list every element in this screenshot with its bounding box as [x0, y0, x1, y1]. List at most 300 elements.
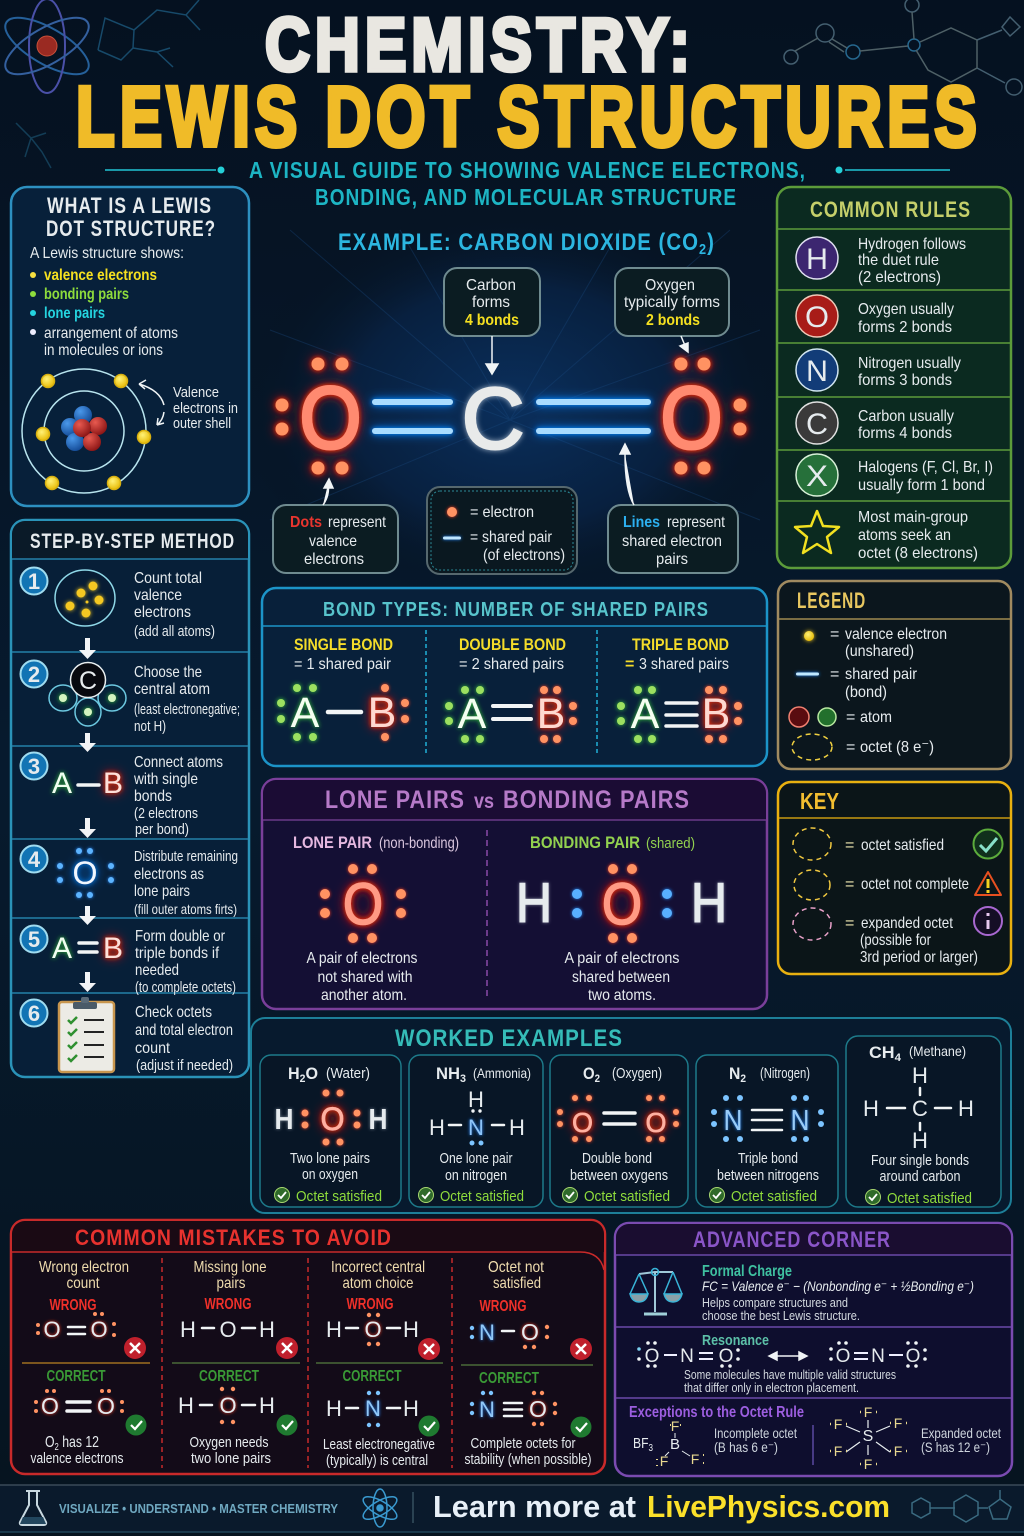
callout: oxygen forms 2 bonds — [615, 268, 729, 336]
subtitle — [105, 157, 950, 210]
example card: water: O — [305, 1064, 318, 1083]
rule: nitrogen — [796, 349, 961, 391]
mistake: incorrect central atom — [316, 1259, 443, 1469]
icon: step 5 double bond: A — [52, 932, 72, 965]
mistake: missing lone pairs: CORRECT — [199, 1368, 259, 1385]
text block: formal charge: Helps compare structures and — [702, 1296, 848, 1310]
example card: ammonia: Octet satisfied — [440, 1188, 524, 1205]
legend item: shared pair: = — [830, 666, 839, 683]
heading: example carbon dioxide: 2 — [699, 241, 707, 258]
diagram: BF3: F — [671, 1418, 679, 1434]
diagram: BF3: F — [660, 1453, 668, 1469]
arrow: lines callout — [620, 444, 634, 505]
example card: ammonia — [409, 1055, 543, 1207]
title: CHEMISTRY: — [265, 2, 695, 86]
title — [76, 2, 982, 164]
example card: oxygen: between oxygens — [570, 1167, 668, 1184]
mistake: missing lone pairs: H — [259, 1317, 275, 1342]
example card: nitrogen: N — [790, 1105, 810, 1137]
diagram: resonance structures: N — [871, 1346, 885, 1367]
text block: step 1 — [134, 570, 215, 640]
mistake: octet not satisfied: N — [479, 1320, 495, 1345]
example card: oxygen: O — [583, 1064, 596, 1083]
diagram: resonance structures: O — [836, 1346, 850, 1367]
callout: lines represent: shared electron — [622, 533, 722, 550]
mistake: octet not satisfied: stability (when possible) — [464, 1451, 592, 1468]
arrow: carbon callout — [486, 336, 498, 374]
bond type: triple: = — [625, 656, 634, 673]
example card: water: on oxygen — [302, 1166, 358, 1183]
bond type: double: A — [458, 690, 487, 738]
mistake: wrong electron count — [22, 1259, 150, 1467]
call to action — [433, 1489, 890, 1524]
mistake: missing lone pairs: O — [219, 1317, 237, 1342]
rule: hydrogen: Hydrogen follows — [858, 236, 966, 253]
example card: water: O — [320, 1101, 344, 1137]
mistake: missing lone pairs: two lone pairs — [191, 1450, 271, 1467]
text block: step 1: (add all atoms) — [134, 623, 215, 640]
diagram: SF6: F — [864, 1456, 872, 1472]
mistake: wrong electron count: has 12 — [59, 1434, 99, 1451]
rule: hydrogen — [796, 236, 966, 286]
legend item: shared pair — [796, 666, 918, 701]
bond type: triple: B — [702, 690, 730, 738]
rule: hydrogen: H — [806, 243, 828, 276]
icon: atom footer — [360, 1489, 400, 1527]
callout: lines represent — [608, 505, 738, 573]
callout: oxygen forms 2 bonds: typically forms — [624, 294, 720, 311]
bonding pair column: H — [516, 871, 552, 934]
text block: expanded octet: (S has 12 e⁻) — [921, 1439, 990, 1455]
heading: lone vs bonding: BONDING PAIRS — [503, 786, 690, 814]
mistake: wrong electron count: count — [66, 1275, 100, 1292]
rule: halogens: Halogens (F, Cl, Br, I) — [858, 459, 993, 476]
mistake: missing lone pairs: H — [178, 1393, 194, 1418]
atom: right oxygen — [660, 358, 746, 474]
panel: advanced corner — [615, 1223, 1012, 1476]
heading: resonance: Resonance — [702, 1332, 769, 1349]
heading: lone vs bonding: LONE PAIRS — [325, 786, 465, 814]
legend item: valence electron: (unshared) — [845, 643, 914, 660]
mistake: wrong electron count: O — [43, 1317, 61, 1342]
rule: halogens — [796, 454, 993, 496]
rule: carbon: forms 4 bonds — [858, 425, 952, 442]
heading: common rules: COMMON RULES — [810, 197, 971, 222]
panel: key — [778, 782, 1011, 974]
mistake: octet not satisfied: O — [521, 1319, 539, 1345]
mistake: incorrect central atom: CORRECT — [342, 1368, 402, 1385]
panel: common rules — [777, 187, 1011, 568]
bond type: triple: TRIPLE BOND — [632, 635, 729, 654]
text block: lewis structure list: arrangement of atoms — [44, 325, 178, 342]
rule: nitrogen: Nitrogen usually — [858, 355, 961, 372]
icon: step 1 electrons — [55, 570, 115, 626]
mistake: missing lone pairs: pairs — [216, 1275, 246, 1292]
legend item: shared pair: (bond) — [845, 684, 887, 701]
example card: methane: 4 — [895, 1052, 902, 1064]
mistake: wrong electron count: WRONG — [50, 1297, 96, 1314]
legend item: atom: = — [846, 709, 855, 726]
text block: incomplete octet: Incomplete octet — [714, 1425, 797, 1441]
diagram: SF6: F — [834, 1416, 842, 1432]
rule: halogens: usually form 1 bond — [858, 477, 985, 494]
example card: water: 2 — [300, 1073, 305, 1085]
example card: water: (Water) — [326, 1065, 370, 1082]
heading: bond types: BOND TYPES: NUMBER OF SHARED PAIRS — [323, 599, 709, 621]
example card: oxygen: O — [572, 1107, 593, 1138]
example card: methane: around carbon — [880, 1168, 960, 1185]
text block: step 4: lone pairs — [134, 883, 190, 900]
bond type: single: = 1 shared pair — [294, 656, 392, 673]
bonding pair column: shared between — [572, 969, 670, 986]
mistake: missing lone pairs: WRONG — [204, 1296, 252, 1313]
text block: expanded octet — [921, 1425, 1001, 1455]
text block: lewis structure list: A Lewis structure shows: — [30, 245, 184, 262]
example card: methane: C — [912, 1096, 928, 1121]
example card: methane: H — [912, 1128, 928, 1153]
example card: water: H — [368, 1104, 388, 1136]
text block: lewis structure list: bonding pairs — [44, 286, 129, 303]
heading: lone vs bonding — [325, 786, 690, 814]
heading: step-by-step: STEP-BY-STEP METHOD — [30, 530, 235, 553]
atom: left oxygen: O — [300, 368, 362, 467]
bond type: single — [277, 635, 409, 741]
decorative molecule top right — [784, 0, 1022, 95]
rule: carbon: Carbon usually — [858, 408, 954, 425]
callout: dots represent — [273, 505, 398, 573]
panel: common mistakes — [11, 1220, 605, 1474]
bond type: single: A — [291, 689, 320, 737]
mistake: incorrect central atom: H — [403, 1396, 419, 1421]
heading: what is: DOT STRUCTURE? — [46, 216, 216, 241]
icon: step 5 double bond — [52, 932, 123, 965]
mistake: missing lone pairs: H — [180, 1317, 196, 1342]
mistake: incorrect central atom: H — [326, 1396, 342, 1421]
bond type: triple: 3 shared pairs — [639, 656, 729, 673]
legend item: octet: octet (8 e⁻) — [860, 739, 934, 756]
bonding pair column: BONDING PAIR — [530, 833, 640, 852]
mistake: wrong electron count: 2 — [55, 1442, 59, 1453]
example card: methane: CH — [869, 1043, 894, 1062]
lone pair column: another atom. — [321, 987, 407, 1004]
callout: center legend: (of electrons) — [483, 547, 565, 564]
text block: step 3: with single — [133, 771, 198, 788]
mistake: missing lone pairs — [172, 1259, 300, 1467]
callout: center legend — [427, 487, 577, 574]
heading: advanced corner: ADVANCED CORNER — [693, 1227, 891, 1252]
panel: step-by-step method — [11, 520, 249, 1077]
step arrows — [79, 638, 96, 992]
key item: octet satisfied: octet satisfied — [861, 837, 944, 854]
bonding pair column: O — [602, 872, 642, 937]
text block: step 6: Check octets — [135, 1004, 212, 1021]
mistake: incorrect central atom: WRONG — [346, 1296, 394, 1313]
text block: step 2: (least electronegative; — [134, 701, 240, 718]
atom: carbon: C — [462, 371, 524, 467]
heading: common mistakes: COMMON MISTAKES TO AVOID — [75, 1225, 392, 1250]
heading: example carbon dioxide: ) — [707, 229, 715, 256]
rule: carbon: C — [806, 408, 828, 441]
callout: center legend: = electron — [470, 504, 534, 521]
example card: nitrogen: (Nitrogen) — [760, 1065, 810, 1082]
rule: oxygen — [796, 295, 954, 337]
text block: valence electrons note — [173, 384, 238, 432]
arrow: resonance — [769, 1352, 807, 1360]
icon: balance scale — [630, 1268, 682, 1314]
example card: ammonia: NH — [436, 1064, 461, 1083]
callout: dots represent: electrons — [304, 551, 364, 568]
step numbers: 1 — [28, 569, 40, 594]
bond type: double — [445, 635, 577, 743]
bond type: single: SINGLE BOND — [294, 635, 393, 654]
call to action: LivePhysics.com — [647, 1489, 890, 1524]
icon: flask — [20, 1491, 46, 1525]
text block: incomplete octet: (B has 6 e⁻) — [714, 1439, 778, 1455]
text block: step 2: central atom — [134, 681, 210, 698]
text block: valence electrons note: outer shell — [173, 415, 231, 432]
example card: oxygen: Octet satisfied — [584, 1188, 670, 1205]
text block: step 1: valence — [134, 587, 182, 604]
example card: nitrogen: N — [729, 1064, 741, 1083]
mistake: wrong electron count: CORRECT — [46, 1368, 106, 1385]
bond type: double: B — [537, 690, 565, 738]
icon: step 2 central atom: C — [79, 667, 97, 695]
bonds: left double bond — [372, 399, 453, 434]
example card: ammonia: (Ammonia) — [473, 1065, 531, 1081]
callout: carbon forms 4 bonds — [444, 268, 540, 336]
text block: lewis structure list: lone pairs — [44, 305, 105, 322]
text block: resonance description: Some molecules have multiple valid structures — [684, 1368, 896, 1382]
example card: methane: H — [912, 1063, 928, 1088]
panel: worked examples — [251, 1018, 1011, 1213]
example card: nitrogen: 2 — [740, 1073, 746, 1085]
text block: formal charge: choose the best Lewis structure. — [702, 1309, 860, 1323]
mistake: wrong electron count: valence electrons — [30, 1450, 124, 1467]
text block: valence electrons note: Valence — [173, 384, 219, 401]
mistake: wrong electron count: O — [97, 1393, 115, 1419]
mistake: missing lone pairs: Oxygen needs — [190, 1434, 268, 1451]
callout: oxygen forms 2 bonds: 2 bonds — [646, 312, 700, 329]
text block: formal charge — [702, 1263, 974, 1323]
example card: methane: Octet satisfied — [887, 1190, 972, 1207]
callout: oxygen forms 2 bonds: Oxygen — [645, 277, 695, 294]
panel: bond types — [262, 588, 767, 766]
example card: ammonia: on nitrogen — [445, 1167, 507, 1184]
key item: octet not complete — [794, 870, 1001, 900]
step numbers: 2 — [28, 662, 40, 687]
text block: step 2: not H) — [134, 718, 166, 735]
example card: methane: Four single bonds — [871, 1152, 969, 1169]
bonding pair column: two atoms. — [588, 987, 656, 1004]
example card: ammonia: H — [429, 1115, 445, 1140]
callout: carbon forms 4 bonds: forms — [472, 294, 510, 311]
subtitle: BONDING, AND MOLECULAR STRUCTURE — [315, 184, 737, 210]
rule: octet star: Most main-group — [858, 509, 968, 526]
example card: nitrogen: Octet satisfied — [731, 1188, 817, 1205]
rule: octet star: octet (8 electrons) — [858, 545, 978, 562]
icon: step 5 double bond: B — [103, 932, 123, 965]
step numbers: 5 — [28, 927, 40, 952]
diagram: BF3: BF — [633, 1435, 652, 1452]
callout: carbon forms 4 bonds: Carbon — [466, 277, 516, 294]
example card: methane: H — [958, 1096, 974, 1121]
mistake: incorrect central atom: N — [365, 1396, 381, 1421]
text block: step 4: electrons as — [134, 866, 204, 883]
rule: hydrogen: the duet rule — [858, 252, 939, 269]
rule: nitrogen: forms 3 bonds — [858, 372, 952, 389]
example card: nitrogen: between nitrogens — [717, 1167, 819, 1184]
diagram: resonance structures: O — [719, 1346, 733, 1367]
diagram: BF3: F — [691, 1451, 699, 1467]
arrow: valence curve — [139, 380, 164, 425]
mistake: wrong electron count: Wrong electron — [39, 1259, 129, 1276]
example card: ammonia: H — [509, 1115, 525, 1140]
example card: oxygen — [550, 1055, 688, 1207]
footer bar — [0, 1485, 1024, 1532]
legend item: valence electron: valence electron — [845, 626, 947, 643]
step numbers: 6 — [28, 1001, 40, 1026]
text block: step 6: (adjust if needed) — [136, 1057, 233, 1074]
heading: lone vs bonding: vs — [474, 790, 494, 813]
mistake: missing lone pairs: Missing lone — [194, 1259, 267, 1276]
text block: step 4: Distribute remaining — [134, 848, 238, 865]
mistake: octet not satisfied: satisfied — [493, 1275, 541, 1292]
diagram: resonance structures: O — [906, 1346, 920, 1367]
step numbers: 4 — [28, 847, 41, 872]
mistake: incorrect central atom: H — [403, 1317, 419, 1342]
icon: step 4 lone pairs: O — [72, 855, 98, 891]
arrow: dots callout — [323, 479, 333, 505]
mistake: octet not satisfied: Complete octets for — [470, 1435, 576, 1452]
rule: carbon — [796, 402, 954, 444]
panel: lone pairs vs bonding pairs — [262, 779, 767, 1009]
example card: oxygen: O — [646, 1107, 666, 1138]
diagram: SF6: F — [864, 1404, 872, 1420]
mistake: octet not satisfied: Octet not — [488, 1259, 544, 1276]
example card: oxygen: (Oxygen) — [612, 1065, 662, 1082]
text block: step 3: Connect atoms — [134, 754, 223, 771]
step numbers — [20, 568, 48, 1026]
mistake: incorrect central atom: O — [364, 1317, 382, 1342]
text block: incomplete octet — [714, 1425, 797, 1455]
text block: step 4 — [134, 848, 238, 917]
bond type: double: DOUBLE BOND — [459, 635, 566, 654]
lone pair column: not shared with — [318, 969, 412, 986]
mistake: missing lone pairs: O — [219, 1393, 237, 1418]
bond type: double: = 2 shared pairs — [459, 656, 564, 673]
callout: dots represent: Dots — [290, 514, 322, 531]
text block: resonance description — [684, 1368, 896, 1395]
legend item: octet — [792, 734, 934, 760]
heading: worked examples: WORKED EXAMPLES — [395, 1025, 623, 1052]
key item: expanded octet: = — [845, 915, 854, 932]
example card: water: H — [274, 1104, 294, 1136]
legend item: shared pair: shared pair — [845, 666, 918, 683]
heading: what is — [46, 193, 216, 241]
legend item: atom: atom — [860, 709, 892, 726]
key item: octet satisfied: = — [845, 837, 854, 854]
icon: atom top left — [0, 0, 97, 93]
rule: nitrogen: N — [806, 355, 828, 388]
tagline: VISUALIZE • UNDERSTAND • MASTER CHEMISTRY — [59, 1502, 339, 1516]
text block: lewis structure list: in molecules or ions — [44, 342, 163, 359]
arrow: oxygen callout — [680, 336, 688, 352]
diagram: resonance structures: N — [680, 1346, 694, 1367]
callout: lines represent: pairs — [656, 551, 688, 568]
rule: hydrogen: (2 electrons) — [858, 269, 941, 286]
bonding pair column — [516, 833, 727, 1004]
bond type: single: B — [368, 689, 396, 737]
diagram: SF6: F — [894, 1415, 902, 1431]
example card: ammonia: One lone pair — [440, 1150, 513, 1167]
diagram: SF6: S — [863, 1428, 873, 1445]
bond type: triple: A — [631, 690, 660, 738]
text block: resonance description: that differ only in electron placement. — [684, 1381, 859, 1395]
bonding pair column: A pair of electrons — [564, 950, 680, 967]
heading: what is: WHAT IS A LEWIS — [47, 193, 212, 218]
text block: valence electrons note: electrons in — [173, 400, 238, 417]
rule: octet star — [795, 509, 978, 562]
example card: nitrogen — [696, 1055, 838, 1207]
heading: exceptions: Exceptions to the Octet Rule — [629, 1404, 804, 1421]
text block: step 5 — [135, 928, 236, 996]
bonding pair column: (shared) — [646, 835, 695, 852]
text block: step 5: triple bonds if — [135, 945, 219, 962]
text block: step 5: Form double or — [135, 928, 226, 945]
key item: expanded octet: (possible for — [860, 932, 932, 949]
text block: lewis structure list — [30, 245, 184, 359]
legend item: octet: = — [846, 739, 855, 756]
heading: legend: LEGEND — [797, 588, 866, 613]
text block: step 3: bonds — [134, 788, 172, 805]
example card: oxygen: 2 — [595, 1073, 600, 1085]
mistake: incorrect central atom: (typically) is central — [326, 1452, 428, 1469]
decorative molecule footer — [912, 1490, 1011, 1522]
mistake: wrong electron count: O — [90, 1317, 108, 1342]
example card: water — [260, 1055, 401, 1207]
icon: step 2 central atom — [49, 662, 126, 726]
subtitle: A VISUAL GUIDE TO SHOWING VALENCE ELECTRONS, — [249, 157, 806, 183]
bonds: right double bond — [536, 399, 651, 434]
rule: octet star: atoms seek an — [858, 527, 951, 544]
icon: step 4 lone pairs — [57, 848, 114, 898]
text block: step 1: electrons — [134, 604, 191, 621]
rule: oxygen: O — [805, 301, 829, 334]
icon: step 3 single bond — [52, 767, 123, 800]
bond type: triple — [617, 635, 742, 743]
diagram: BF3 — [633, 1418, 704, 1469]
panel: what is a lewis dot structure — [11, 187, 249, 506]
key item: octet satisfied — [793, 828, 1002, 860]
diagram: SF6 — [830, 1404, 907, 1472]
mistake: missing lone pairs: H — [259, 1393, 275, 1418]
example card: oxygen: Double bond — [582, 1150, 652, 1167]
callout: dots represent: represent — [328, 514, 386, 531]
mistake: octet not satisfied: CORRECT — [479, 1370, 539, 1387]
legend item: valence electron: = — [830, 626, 839, 643]
mistake: octet not satisfied — [461, 1259, 593, 1468]
example card: methane — [846, 1036, 1001, 1207]
atom: right oxygen: O — [660, 368, 722, 467]
example card: nitrogen: N — [724, 1105, 742, 1137]
icon: step 6 clipboard — [59, 997, 114, 1072]
text block: step 3: (2 electrons — [134, 805, 198, 822]
mistake: wrong electron count: O — [45, 1434, 57, 1451]
diagram: SF6: F — [834, 1443, 842, 1459]
mistake: incorrect central atom: Incorrect central — [331, 1259, 425, 1276]
diagram: resonance structures — [637, 1341, 927, 1368]
rule: halogens: X — [806, 460, 828, 493]
